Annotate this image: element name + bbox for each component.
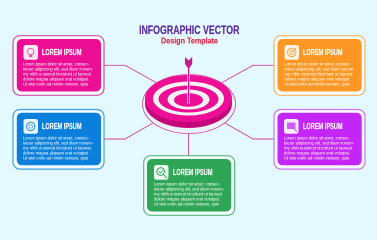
panel: purple card bbox=[274, 110, 365, 169]
panel: green card bbox=[144, 156, 235, 215]
body text bbox=[154, 182, 225, 206]
panel: pink card: LOREM IPSUM bbox=[42, 48, 82, 57]
icon: arrow bbox=[185, 57, 192, 103]
title: Design Template bbox=[161, 36, 218, 46]
body text: Ut wisi enim ad minim veniam, quis bbox=[284, 82, 350, 86]
body text: my nibh euismod tincidunt ut laoreet bbox=[284, 145, 353, 150]
panel: blue card bbox=[13, 110, 104, 169]
body text: dolore magna aliquam erat volutpat. bbox=[284, 150, 350, 155]
panel: orange card: LOREM IPSUM bbox=[303, 48, 343, 57]
title: INFOGRAPHIC VECTOR bbox=[139, 23, 240, 37]
body text bbox=[284, 62, 355, 86]
panel: orange card bbox=[274, 36, 365, 95]
target bbox=[142, 57, 236, 134]
body text: dolore magna aliquam erat volutpat. bbox=[23, 76, 89, 82]
icon: target bbox=[284, 45, 299, 60]
body text bbox=[23, 62, 94, 86]
icon: magnifier check bbox=[154, 165, 168, 180]
body text: Ut wisi enim ad minim veniam, quis bbox=[284, 155, 349, 160]
body text: my nibh euismod tincidunt ut laoreet bbox=[23, 145, 92, 150]
body text: Lorem ipsum dolor sit amet, consec- bbox=[284, 135, 351, 140]
body text: Lorem ipsum dolor sit amet, consec- bbox=[284, 62, 351, 66]
body text: Lorem ipsum dolor sit amet, consec- bbox=[154, 182, 221, 186]
body text: Lorem ipsum dolor sit amet, consec- bbox=[23, 135, 90, 140]
connector lines bbox=[104, 65, 274, 156]
body text: tetuer adipiscing elit, sed diam nonum- bbox=[284, 66, 355, 72]
body text: my nibh euismod tincidunt ut laoreet bbox=[23, 72, 92, 76]
body text: Ut wisi enim ad minim veniam, quis bbox=[23, 82, 88, 86]
icon: gear bbox=[24, 119, 38, 134]
body text bbox=[23, 135, 94, 160]
body text: tetuer adipiscing elit, sed diam nonum- bbox=[154, 186, 225, 192]
panel: pink card bbox=[13, 36, 104, 95]
title bbox=[139, 23, 240, 46]
body text: tetuer adipiscing elit, sed diam nonum- bbox=[284, 140, 355, 145]
body text: Ut wisi enim ad minim veniam, quis bbox=[154, 202, 219, 206]
body text: Ut wisi enim ad minim veniam, quis bbox=[23, 155, 88, 160]
body text: dolore magna aliquam erat volutpat. bbox=[284, 76, 350, 82]
body text: dolore magna aliquam erat volutpat. bbox=[23, 150, 89, 155]
body text: tetuer adipiscing elit, sed diam nonum- bbox=[23, 140, 94, 145]
body text: my nibh euismod tincidunt ut laoreet bbox=[154, 192, 223, 196]
body text: my nibh euismod tincidunt ut laoreet bbox=[284, 72, 353, 76]
body text: dolore magna aliquam erat volutpat. bbox=[154, 196, 220, 202]
body text: tetuer adipiscing elit, sed diam nonum- bbox=[23, 66, 94, 72]
panel: blue card: LOREM IPSUM bbox=[42, 122, 82, 131]
panel: green card: LOREM IPSUM bbox=[173, 168, 213, 177]
panel: purple card: LOREM IPSUM bbox=[303, 122, 343, 131]
icon: chat search bbox=[284, 119, 298, 134]
body text bbox=[284, 135, 355, 160]
icon: light bulb bbox=[24, 45, 38, 60]
body text: Lorem ipsum dolor sit amet, consec- bbox=[23, 62, 90, 66]
